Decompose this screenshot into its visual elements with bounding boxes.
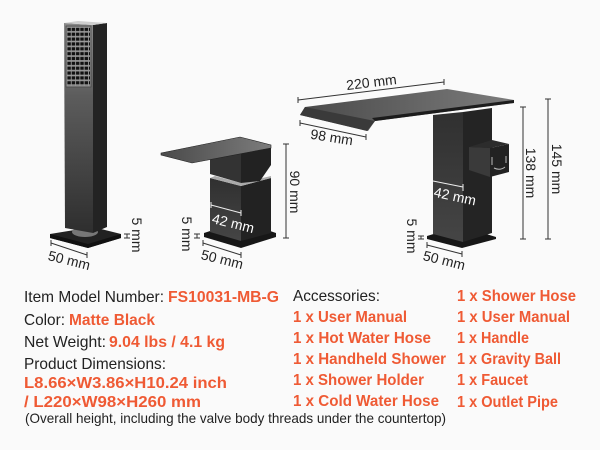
accessories column one: 1 x Cold Water Hose (293, 393, 439, 410)
faucet body (433, 108, 492, 242)
accessories column one (293, 309, 446, 410)
accessories heading: Accessories: (293, 288, 380, 305)
faucet spout (300, 89, 514, 131)
mixer upper block (210, 145, 271, 183)
net weight: Net Weight: (24, 334, 106, 351)
dimension: mixer height (283, 144, 303, 238)
dimension: mixer height: 90 mm (287, 171, 303, 213)
dimension: mixer base thickness: 5 mm (179, 216, 195, 252)
shower base (50, 227, 121, 248)
color: Color: (24, 312, 65, 329)
accessories column two: 1 x Handle (457, 330, 529, 347)
handheld shower (47, 21, 145, 273)
waterfall faucet (298, 71, 565, 273)
faucet base (427, 226, 496, 248)
accessories column one: 1 x Handheld Shower (293, 351, 446, 368)
product dimensions: / L220×W98×H260 mm (24, 394, 201, 411)
dimension: faucet body width: 42 mm (432, 184, 478, 208)
net weight (24, 334, 225, 351)
color: Matte Black (69, 312, 155, 329)
accessories column two (457, 288, 576, 411)
accessories list (293, 288, 576, 411)
accessories column one: 1 x User Manual (293, 309, 407, 326)
product dimensions: L8.66×W3.86×H10.24 inch (24, 375, 227, 392)
item model number (24, 289, 279, 306)
dimension: spout length: 220 mm (345, 71, 397, 93)
accessories column two: 1 x Faucet (457, 372, 529, 389)
product dimensions (24, 356, 227, 411)
product specifications (24, 289, 446, 426)
dimension: mixer body width: 42 mm (211, 210, 256, 236)
product dimensions: Product Dimensions: (24, 356, 166, 373)
accessories column two: 1 x Outlet Pipe (457, 394, 558, 411)
accessories column one: 1 x Hot Water Hose (293, 330, 431, 347)
dimension: spout length (298, 71, 444, 103)
accessories column two: 1 x Shower Hose (457, 288, 576, 305)
net weight: 9.04 lbs / 4.1 kg (109, 334, 225, 351)
dimension: 138 mm height (520, 107, 539, 239)
mixer base (204, 221, 276, 248)
dimension: faucet base thickness: 5 mm (404, 218, 420, 254)
mixer handle (161, 137, 303, 272)
dimension: 138 mm height: 138 mm (523, 148, 539, 198)
item model number: Item Model Number: (24, 289, 164, 306)
accessories column two: 1 x Gravity Ball (457, 351, 561, 368)
mixer lower block (210, 176, 271, 241)
shower spray face (66, 26, 91, 87)
dimension: faucet base width: 50 mm (422, 247, 467, 273)
mixer lever plate (161, 137, 271, 163)
dimension: 145 mm height (545, 99, 565, 239)
dimension: shower base thickness: 5 mm (129, 218, 145, 252)
dimension: spout width: 98 mm (309, 126, 354, 148)
shower handle body (64, 21, 107, 233)
dimension: 145 mm height: 145 mm (549, 144, 565, 194)
faucet knob (469, 140, 509, 177)
accessories column two: 1 x User Manual (457, 309, 570, 326)
dimension: shower base width: 50 mm (47, 247, 92, 273)
accessories column one: 1 x Shower Holder (293, 372, 424, 389)
dimension: mixer base width: 50 mm (200, 246, 245, 272)
dimension: spout width (300, 120, 366, 148)
height note: (Overall height, including the valve body threads under the countertop) (25, 410, 446, 426)
color (24, 312, 155, 329)
item model number: FS10031-MB-G (168, 289, 279, 306)
